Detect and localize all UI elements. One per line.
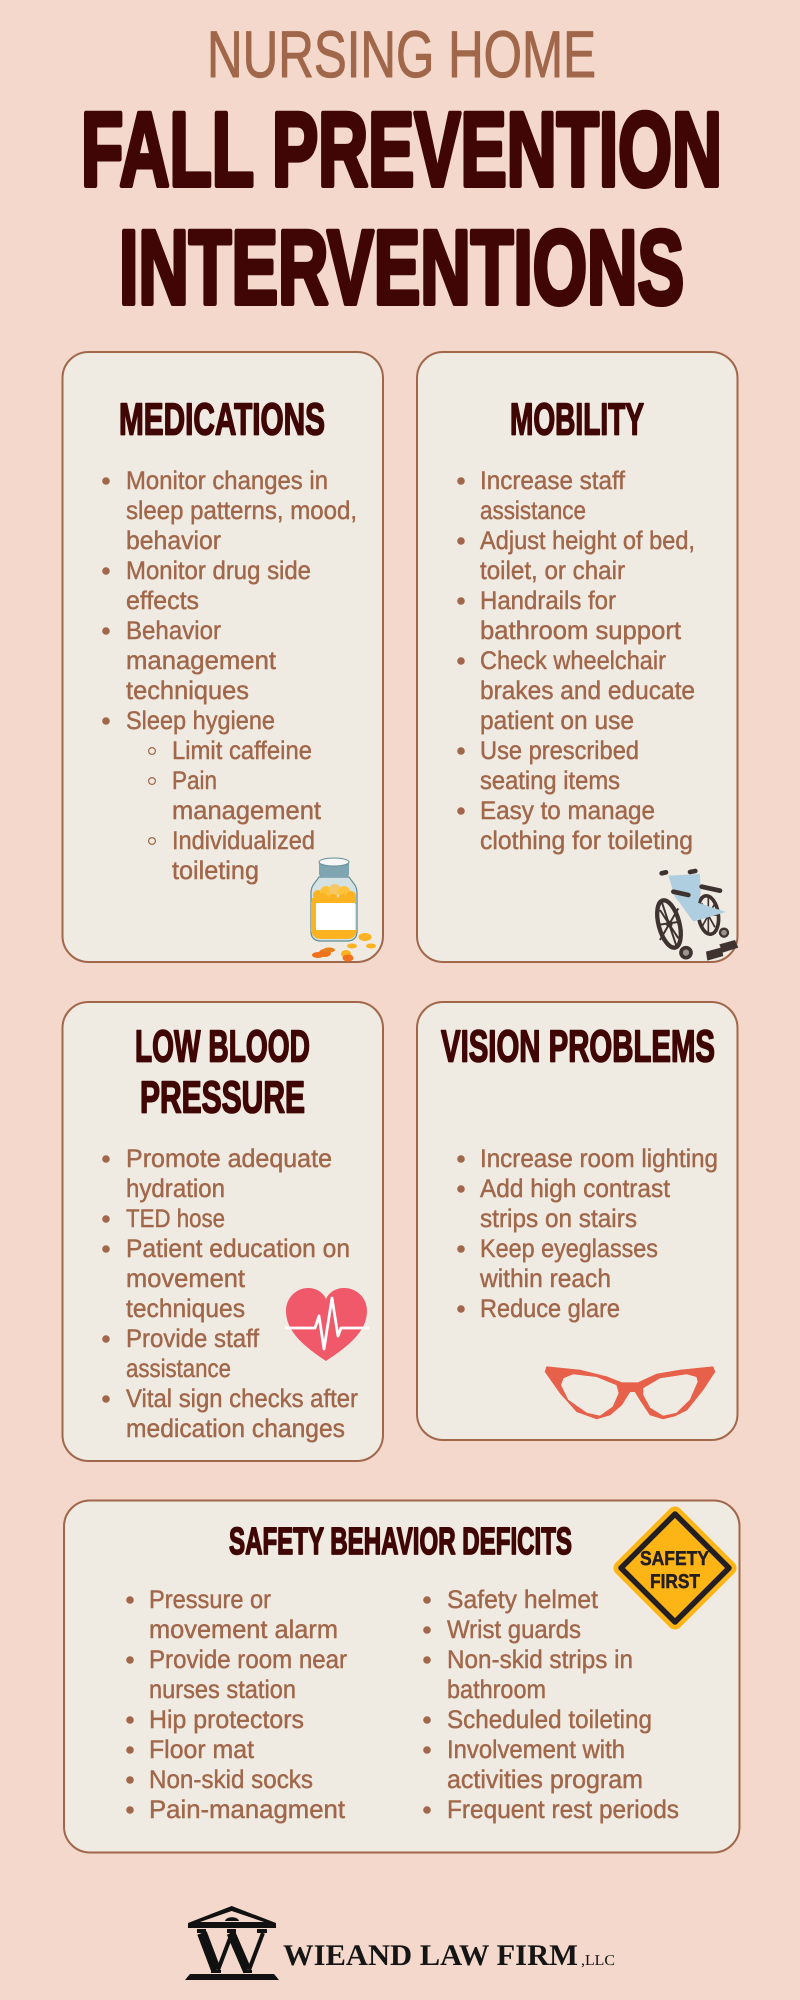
list: low blood pressure: Promote adequate (126, 1145, 332, 1173)
list: low blood pressure: medication changes (126, 1415, 345, 1443)
list: low blood pressure: movement (126, 1265, 245, 1293)
list: medications: Behavior (126, 617, 221, 645)
list: medications (102, 467, 357, 885)
list: safety left column: nurses station (149, 1676, 296, 1704)
list: mobility: bathroom support (480, 617, 681, 645)
list: medications: Pain (172, 767, 217, 795)
list: mobility: Use prescribed (480, 737, 639, 765)
list: mobility: patient on use (480, 707, 634, 735)
list: safety right column: Scheduled toileting (447, 1706, 652, 1734)
list: mobility: toilet, or chair (480, 557, 625, 585)
list: low blood pressure: TED hose (126, 1205, 225, 1233)
logo: wieand law firm: ,LLC (581, 1953, 615, 1969)
list: safety right column: Involvement with (447, 1736, 625, 1764)
list: medications: Limit caffeine (172, 737, 312, 765)
panel: medications (62, 352, 383, 962)
list: mobility: Easy to manage (480, 797, 655, 825)
list: mobility: Handrails for (480, 587, 616, 615)
list: safety left column (126, 1586, 347, 1824)
list: vision problems: strips on stairs (480, 1205, 637, 1233)
list: safety right column: Frequent rest periods (447, 1796, 679, 1824)
list: safety right column: activities program (447, 1766, 643, 1794)
list: medications: sleep patterns, mood, (126, 497, 357, 525)
heading: low blood pressure: PRESSURE (140, 1072, 305, 1122)
list: medications: management (172, 797, 321, 825)
list: safety left column: Hip protectors (149, 1706, 304, 1734)
list: medications: Sleep hygiene (126, 707, 275, 735)
list: medications: behavior (126, 527, 221, 555)
icon: safety first sign (621, 1514, 729, 1622)
panel: safety behavior deficits (64, 1500, 740, 1852)
subtitle: nursing home: NURSING HOME (207, 17, 596, 91)
list: safety left column: movement alarm (149, 1616, 338, 1644)
list: safety right column: Safety helmet (447, 1586, 598, 1614)
list: mobility (457, 467, 695, 855)
list: medications: Monitor drug side (126, 557, 311, 585)
list: medications: Monitor changes in (126, 467, 328, 495)
list: medications: techniques (126, 677, 249, 705)
list: vision problems: within reach (479, 1265, 611, 1293)
list: low blood pressure: assistance (126, 1355, 231, 1383)
panel: low blood pressure (62, 1002, 383, 1461)
list: low blood pressure: Patient education on (126, 1235, 350, 1263)
list: mobility: clothing for toileting (480, 827, 693, 855)
list: medications: Individualized (172, 827, 315, 855)
icon: courthouse (185, 1906, 279, 1980)
list: low blood pressure: Provide staff (126, 1325, 260, 1353)
panel: vision problems (417, 1002, 738, 1440)
list: medications: effects (126, 587, 199, 615)
list: mobility: Check wheelchair (480, 647, 666, 675)
list: low blood pressure (102, 1145, 358, 1443)
list: low blood pressure: Vital sign checks after (126, 1385, 358, 1413)
list: safety left column: Provide room near (149, 1646, 347, 1674)
heading: medications: MEDICATIONS (119, 394, 325, 444)
heading: low blood pressure (135, 1020, 310, 1122)
list: mobility: assistance (480, 497, 586, 525)
panel: mobility (417, 352, 738, 962)
heading: safety behavior deficits: SAFETY BEHAVIOR DEFICITS (229, 1521, 572, 1563)
list: low blood pressure: hydration (126, 1175, 225, 1203)
list: safety left column: Non-skid socks (149, 1766, 313, 1794)
title (81, 17, 722, 326)
icon: pill bottle (311, 858, 376, 962)
list: safety right column (423, 1586, 679, 1824)
icon: heart with pulse line (285, 1288, 369, 1361)
list: vision problems: Increase room lighting (480, 1145, 718, 1173)
list: vision problems: Add high contrast (480, 1175, 670, 1203)
list: mobility: Increase staff (480, 467, 626, 495)
list: mobility: Adjust height of bed, (480, 527, 695, 555)
list: safety right column: bathroom (447, 1676, 546, 1704)
list: safety right column: Wrist guards (447, 1616, 581, 1644)
list: low blood pressure: techniques (126, 1295, 245, 1323)
logo: wieand law firm (185, 1906, 615, 1980)
icon: cat-eye glasses (545, 1367, 715, 1419)
list: safety left column: Pressure or (149, 1586, 271, 1614)
list: medications: management (126, 647, 276, 675)
list: safety right column: Non-skid strips in (447, 1646, 633, 1674)
wordmark: WIEAND LAW FIRM (283, 1939, 578, 1972)
heading: mobility: MOBILITY (510, 394, 644, 444)
icon: safety first sign: SAFETY (640, 1548, 710, 1570)
heading: low blood pressure: LOW BLOOD (135, 1020, 310, 1072)
list: safety left column: Pain-managment (149, 1796, 345, 1824)
list: vision problems: Reduce glare (480, 1295, 620, 1323)
list: vision problems: Keep eyeglasses (480, 1235, 658, 1263)
icon: wheelchair (653, 871, 738, 961)
icon: safety first sign: FIRST (650, 1571, 700, 1593)
list: safety left column: Floor mat (149, 1736, 254, 1764)
list: medications: toileting (172, 857, 259, 885)
list: mobility: brakes and educate (480, 677, 695, 705)
list: mobility: seating items (480, 767, 620, 795)
list: vision problems (457, 1145, 718, 1323)
